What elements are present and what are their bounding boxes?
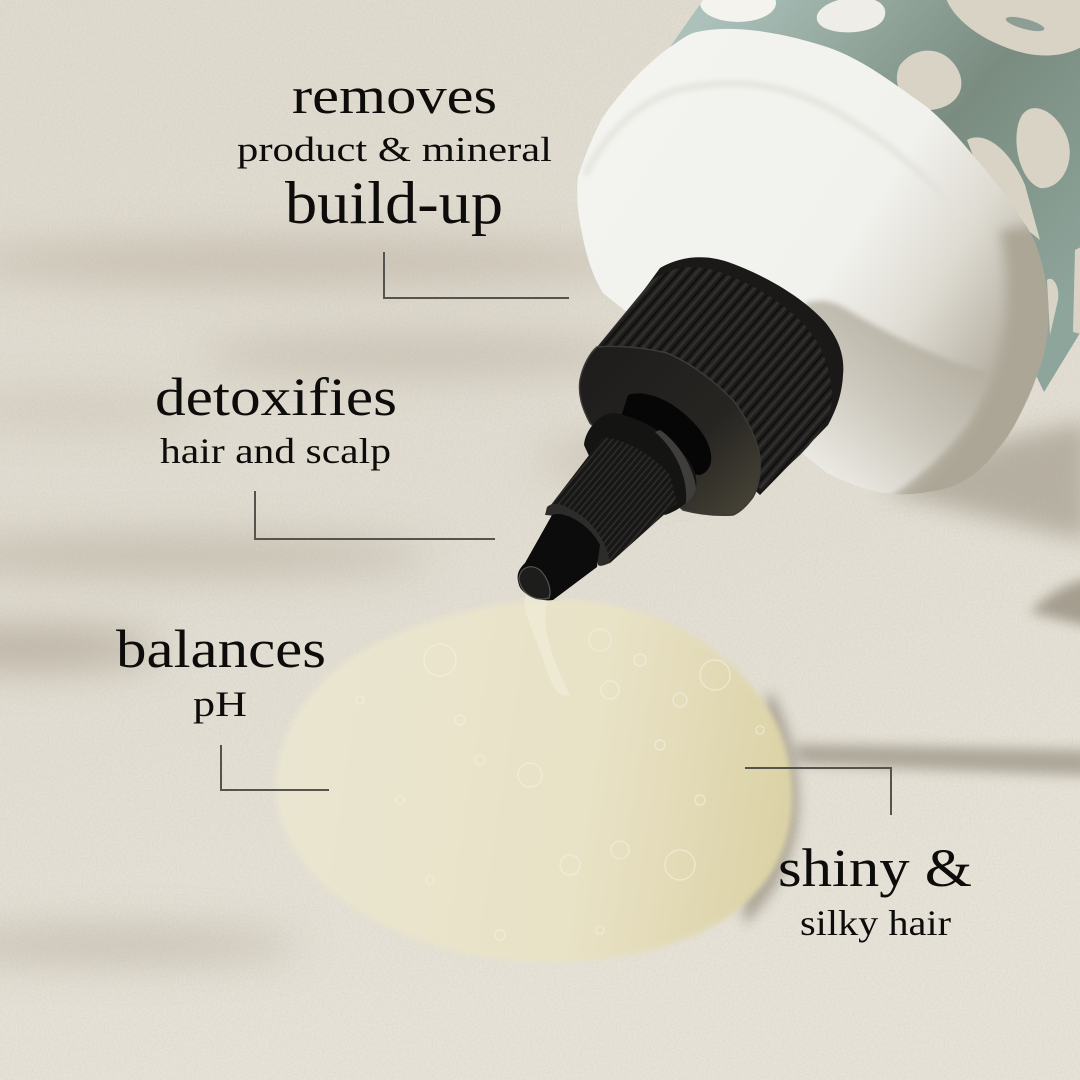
outer cap rim xyxy=(600,257,843,495)
ribbed collar xyxy=(597,267,832,490)
right rim shade xyxy=(912,222,1048,494)
callout: balances pH: balances xyxy=(116,619,326,679)
gel puddle xyxy=(276,595,1080,962)
callout: shiny and silky hair: silky hair xyxy=(800,903,951,943)
callout: detoxifies: hair and scalp xyxy=(160,431,391,471)
nozzle collar xyxy=(584,413,696,515)
palm leaf shadows xyxy=(0,238,700,960)
spot marks xyxy=(1006,16,1044,32)
nozzle tip xyxy=(518,514,600,600)
flange disc xyxy=(579,346,760,515)
hex nut seat xyxy=(620,393,711,475)
black nozzle cap xyxy=(518,257,843,600)
white brush spots xyxy=(700,0,1080,335)
callout: removes build-up: build-up xyxy=(285,170,503,236)
rim crease xyxy=(584,80,919,174)
puddle bubbles xyxy=(356,629,764,940)
shadow cast by bottle on surface xyxy=(880,420,1080,628)
callout: removes build-up: removes xyxy=(292,68,497,125)
callout: detoxifies xyxy=(155,367,495,539)
white bottle base xyxy=(577,28,1048,494)
puddle shadow xyxy=(730,690,1080,925)
callout: balances pH: pH xyxy=(193,684,247,724)
puddle body xyxy=(276,600,793,962)
bottle xyxy=(560,0,1080,510)
callout: removes build-up: product & mineral xyxy=(237,130,552,169)
callout: shiny and silky hair xyxy=(745,768,972,943)
callout: removes build-up xyxy=(237,68,569,298)
green patterned body xyxy=(660,0,1080,395)
ribbed cone xyxy=(547,437,677,563)
callout: balances pH xyxy=(116,619,329,790)
callout: shiny and silky hair: shiny & xyxy=(778,838,972,898)
cone lip xyxy=(545,504,610,566)
shaded lower face xyxy=(802,298,977,494)
gel stream xyxy=(524,595,570,696)
callout: detoxifies: detoxifies xyxy=(155,367,397,427)
